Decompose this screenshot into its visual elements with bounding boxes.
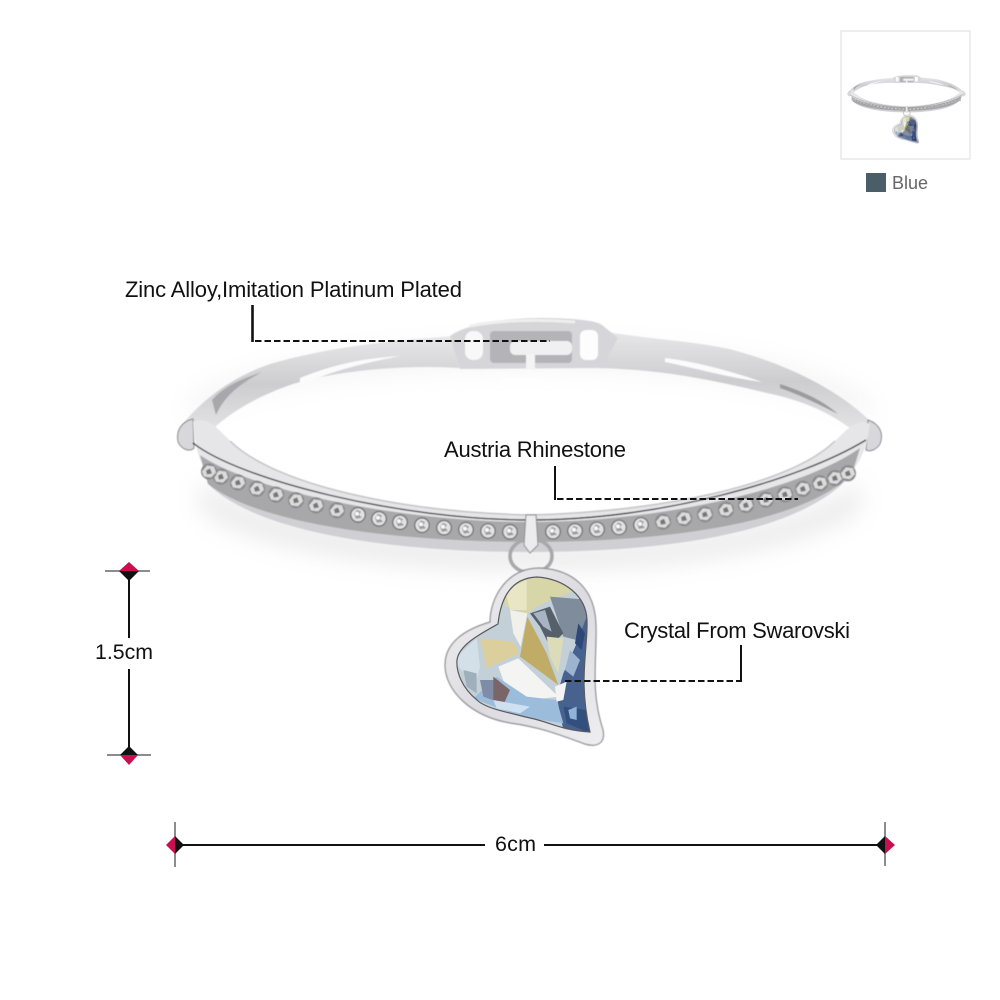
bracelet shadow halo (190, 344, 870, 570)
side hinge rings (178, 419, 882, 451)
vertical rule (128, 571, 130, 755)
leader vertical (554, 466, 556, 500)
height value: 1.5cm (95, 640, 153, 664)
front bar (193, 420, 870, 552)
crystal facets (450, 570, 600, 743)
clasp (450, 318, 618, 370)
leader dashes (565, 680, 741, 682)
thumbnail bracelet (848, 75, 965, 143)
heart pendant (445, 568, 604, 745)
colour swatch (866, 173, 886, 192)
dimension: height 1.5cm (95, 562, 153, 765)
thumbnail heart shading (897, 117, 919, 143)
leader dashes (557, 498, 798, 500)
width value: 6cm (495, 832, 536, 856)
pendant bail (510, 515, 552, 573)
right tick (884, 822, 886, 866)
top tick (105, 570, 150, 572)
left marker (166, 836, 184, 854)
horizontal rule (175, 844, 885, 846)
leader vertical (251, 305, 254, 342)
colour name: Blue (892, 173, 928, 193)
thumbnail frame (841, 31, 970, 159)
label: rhinestone: Austria Rhinestone (444, 437, 626, 462)
colour option thumbnail (841, 31, 970, 193)
leader vertical (740, 645, 742, 682)
left tick (174, 822, 176, 867)
leader dashes (255, 340, 550, 342)
back band (178, 330, 880, 432)
bottom tick (107, 754, 151, 756)
crystal outline (457, 577, 590, 732)
top marker (119, 562, 139, 581)
bottom marker (120, 746, 138, 765)
rhinestone row (201, 464, 856, 540)
main bracelet (178, 318, 882, 745)
dimension: width 6cm (166, 822, 895, 867)
label: crystal: Crystal From Swarovski (624, 618, 850, 643)
right marker (876, 836, 895, 854)
heart setting (445, 568, 604, 745)
label: material: Zinc Alloy,Imitation Platinum Plated (125, 277, 462, 302)
